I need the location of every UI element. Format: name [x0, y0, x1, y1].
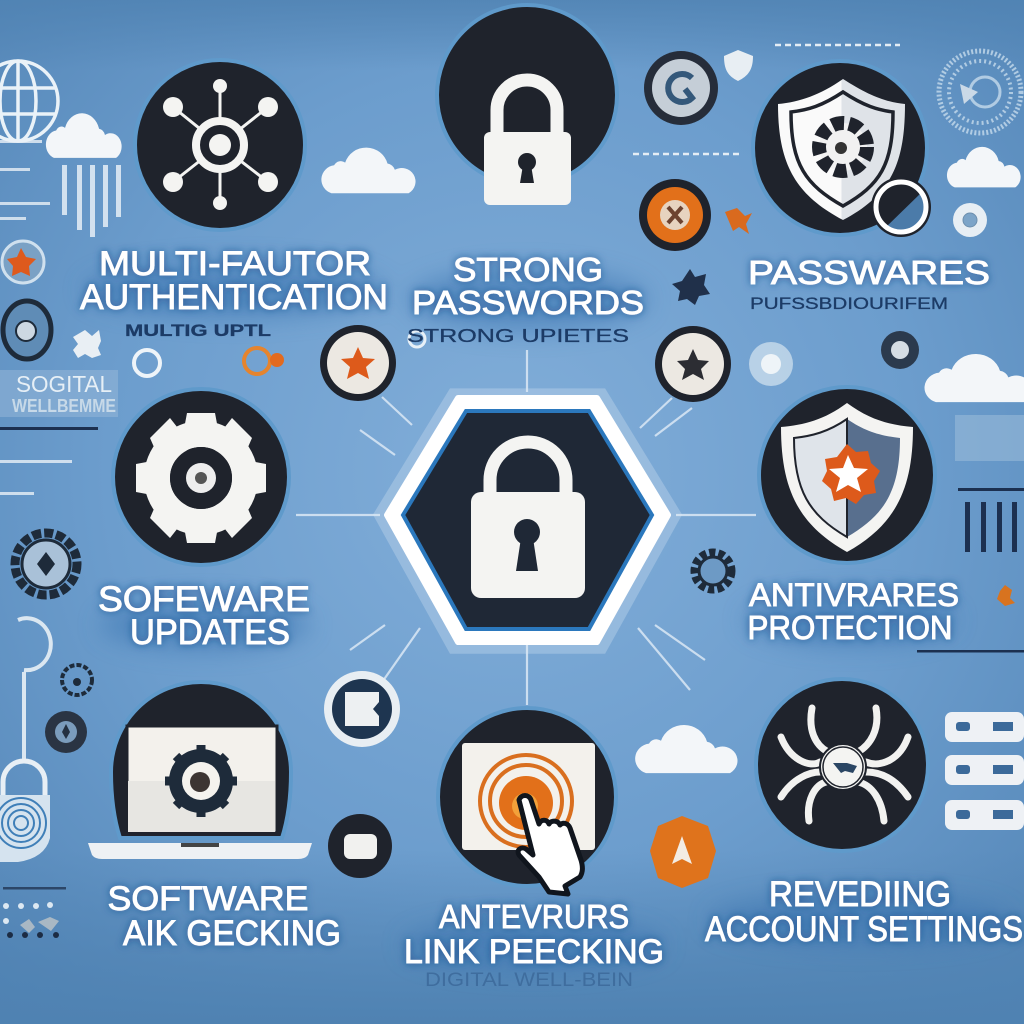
label: strong passwords: PASSWORDS — [412, 284, 644, 321]
label: strong passwords: STRONG — [453, 251, 603, 288]
icon: padlock — [484, 80, 571, 205]
icon: orange badge top — [639, 179, 711, 251]
label: multi-factor authentication: AUTHENTICATION — [80, 278, 388, 317]
label: revealing account settings: REVEDIING — [769, 875, 951, 914]
small dashes — [633, 45, 900, 154]
panel: strong passwords circle — [437, 5, 617, 205]
label: antivirus protection — [748, 577, 959, 646]
connector rays from hexagon — [296, 350, 756, 705]
icon: shield with star — [781, 403, 913, 552]
icon: shield with gear — [778, 79, 905, 220]
label: multi-factor authentication: MULTI-FAUTOR — [99, 245, 371, 283]
icon: pale ring right — [953, 203, 987, 237]
label: software link checking — [108, 880, 341, 953]
label: software updates: SOFEWARE — [98, 580, 310, 619]
icon: cloud top centre — [321, 148, 416, 193]
panel: multi-factor authentication circle — [135, 60, 305, 230]
label: passwares: PUFSSBDIOURIFEM — [750, 294, 948, 313]
icon: hand pointer — [518, 796, 582, 894]
icon: spider — [781, 708, 908, 821]
label: passwares: PASSWARES — [748, 254, 990, 291]
icon: clover — [73, 330, 101, 358]
icon: cloud right large — [925, 354, 1024, 402]
icon: orange ring — [244, 348, 284, 374]
right chart bars — [917, 415, 1024, 652]
label: software updates — [98, 580, 310, 652]
label: passwares — [748, 254, 990, 313]
icon: G badge — [644, 51, 718, 125]
small badges — [2, 50, 987, 888]
label: antivirus link checking — [404, 898, 664, 991]
icon: white ring — [134, 350, 160, 376]
center hexagon lock — [373, 388, 682, 654]
icon: orange spark — [725, 208, 752, 234]
icon: laptop with gear — [88, 726, 312, 859]
icon: magnifier — [871, 177, 931, 237]
bottom-left dotted legend — [3, 887, 66, 938]
icon: ring near hexagon — [409, 331, 425, 347]
icon: cloud bottom — [635, 725, 738, 773]
label: antivirus protection: PROTECTION — [748, 609, 952, 646]
left list bars — [0, 140, 72, 495]
panel: antivirus shield circle — [759, 387, 935, 563]
icon: star badge left — [320, 325, 396, 401]
icon: orange hexagon badge — [650, 816, 716, 888]
label: antivirus link checking: LINK PEECKING — [404, 933, 664, 971]
icon: left dark target — [3, 301, 51, 359]
icon: dark gear right — [695, 553, 731, 589]
icon: screen with target — [462, 743, 595, 850]
icon: dark star — [672, 269, 710, 305]
label: antivirus link checking: ANTEVRURS — [439, 898, 629, 935]
icon: circular fingerprint globe — [939, 51, 1021, 133]
icon: book badge — [324, 671, 400, 747]
panel: side label social wellbeing: SOGITAL — [16, 371, 112, 397]
panel: passwares shield circle — [753, 61, 931, 237]
label: multi-factor authentication — [80, 245, 388, 340]
icon: dark blob badge — [45, 711, 87, 753]
icon: globe — [0, 61, 58, 141]
icon: cloud with rain — [46, 113, 122, 237]
label: antivirus protection: ANTIVRARES — [749, 577, 959, 613]
icon: star badge right — [655, 326, 731, 402]
label: revealing account settings — [705, 875, 1023, 949]
label: multi-factor authentication: MULTIG UPTL — [125, 321, 271, 340]
icon: hanging padlock — [0, 618, 51, 862]
label: software link checking: SOFTWARE — [108, 880, 308, 918]
icon: white globe dot — [749, 342, 793, 386]
panel: spider circle — [756, 679, 928, 851]
panel: side label social wellbeing: WELLBEMME — [12, 396, 116, 416]
panel: software updates gear circle — [113, 389, 289, 565]
icon: cloud right top — [947, 147, 1021, 187]
icon: chat badge — [328, 814, 392, 878]
icon: small shield — [724, 50, 753, 81]
icon: network hub — [163, 79, 278, 210]
label: software updates: UPDATES — [130, 613, 290, 652]
icon: left star badge — [2, 241, 44, 283]
icon: dark gear left — [15, 533, 77, 595]
label: strong passwords: STRONG UPIETES — [407, 326, 629, 346]
panel: laptop circle — [88, 682, 312, 859]
right list: server rows — [945, 712, 1024, 830]
label: antivirus link checking: DIGITAL WELL-BEIN — [425, 970, 633, 991]
label: strong passwords — [407, 251, 644, 346]
panel: side label social wellbeing — [0, 370, 118, 417]
panel: link checking circle — [438, 708, 616, 894]
icon: dark flower — [881, 331, 919, 369]
icon: large padlock — [471, 442, 585, 598]
icon: gear — [136, 413, 266, 543]
label: software link checking: AIK GECKING — [123, 914, 341, 953]
icon: small gear bottom — [62, 665, 92, 695]
